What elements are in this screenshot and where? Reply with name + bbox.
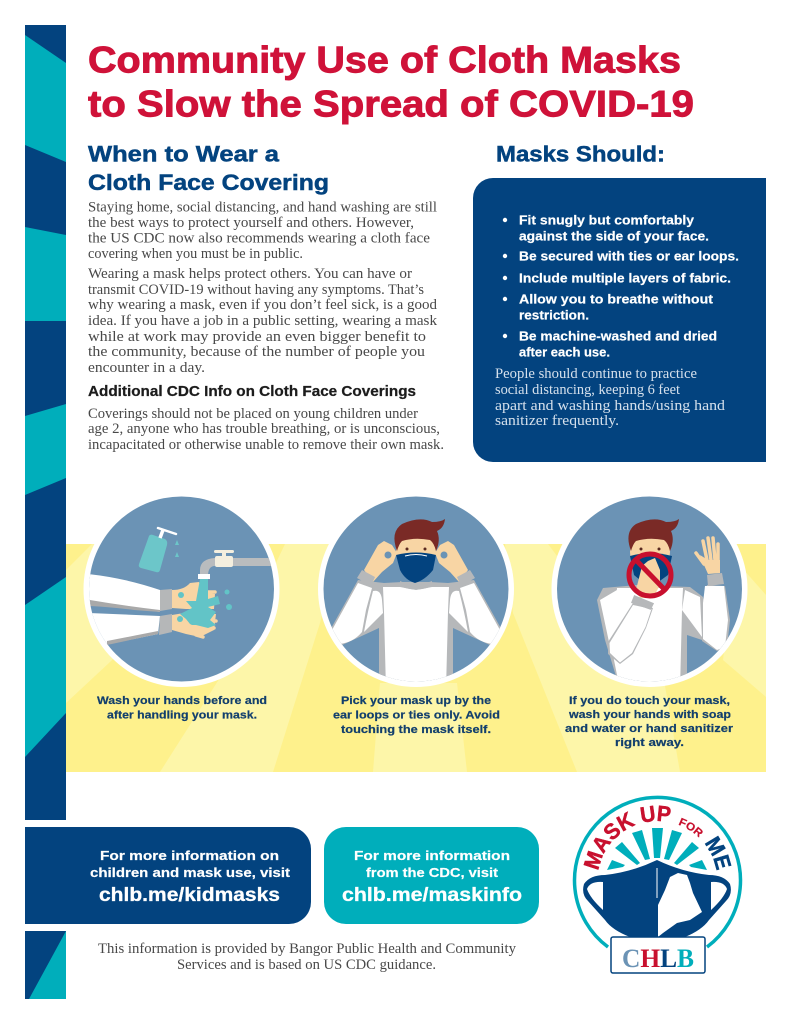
logo CHLB badge <box>611 937 705 973</box>
heading: when to wear: When to Wear a <box>88 142 280 166</box>
hands <box>364 541 397 582</box>
callout: CDC mask info: from the CDC, visit <box>366 865 499 880</box>
mask <box>630 554 672 581</box>
text block: intro paragraph: the US CDC now also recommends wearing a cloth face <box>88 230 430 246</box>
logo mask <box>583 860 731 942</box>
panel note: apart and washing hands/using hand <box>495 398 726 414</box>
hand on mask <box>636 558 660 598</box>
bullet list: Be machine-washed and dried <box>519 330 717 344</box>
panel note: People should continue to practice <box>495 366 697 382</box>
water and soap <box>180 579 220 628</box>
callout: CDC mask info: chlb.me/maskinfo <box>342 885 522 906</box>
caption: pick up mask: Pick your mask up by the <box>341 695 491 707</box>
logo rays <box>607 828 707 870</box>
bullet list: after each use. <box>519 346 610 360</box>
panel: masks should <box>473 178 766 462</box>
text block: why wear a mask: encounter in a day. <box>88 360 205 376</box>
icon: faucet <box>198 550 272 579</box>
panel note: sanitizer frequently. <box>495 413 619 429</box>
text block: additional info: age 2, anyone who has trouble breathing, or is unconscious, <box>88 421 440 437</box>
text block: why wear a mask: while at work may provide an even bigger benefit to <box>88 329 426 345</box>
text block: intro paragraph: the best ways to protect yourself and others. However, <box>88 215 414 231</box>
text block: why wear a mask: the community, because of the number of people you <box>88 344 425 360</box>
footer note: This information is provided by Bangor Public Health and Community <box>98 941 517 957</box>
arms and hands <box>88 574 160 612</box>
raised hand <box>696 538 724 586</box>
footer note: Services and is based on US CDC guidance. <box>177 957 436 973</box>
cuff <box>633 597 652 608</box>
logo text: MASK UP <box>584 805 671 870</box>
bullet list: Allow you to breathe without <box>519 292 714 306</box>
callout: CDC mask info: For more information <box>354 848 510 863</box>
heading: when to wear: Cloth Face Covering <box>88 170 329 195</box>
caption: wash hands <box>97 695 267 722</box>
logo Maine outline <box>658 873 702 937</box>
bullet list <box>503 214 739 360</box>
sweatshirt <box>597 585 703 690</box>
subheading: additional info: Additional CDC Info on Cloth Face Coverings <box>88 384 416 400</box>
icon: sanitizer bottle <box>139 528 179 572</box>
callout: kid masks: chlb.me/kidmasks <box>99 885 280 906</box>
caption: touch mask: If you do touch your mask, <box>569 695 730 707</box>
bullet list: restriction. <box>519 308 589 322</box>
logo CHLB badge: CHLB <box>622 944 694 973</box>
text block: intro paragraph: Staying home, social distancing, and hand washing are still <box>88 200 437 216</box>
bullet list: against the side of your face. <box>519 230 709 244</box>
logo text: ME <box>704 836 732 870</box>
head <box>630 538 670 556</box>
footer note <box>98 941 517 973</box>
mask <box>396 552 436 583</box>
callout: kid masks: children and mask use, visit <box>90 865 291 880</box>
logo text: FOR <box>678 818 703 838</box>
text block: why wear a mask: transmit COVID-19 without having any symptoms. That’s <box>88 282 424 298</box>
icon: person adjusting mask <box>318 491 514 690</box>
head <box>396 538 436 560</box>
text block: additional info: Coverings should not be placed on young children under <box>88 406 418 422</box>
yellow band with rays <box>66 544 766 772</box>
caption: touch mask: right away. <box>615 737 684 749</box>
caption: wash hands: Wash your hands before and <box>97 695 267 707</box>
title: to Slow the Spread of COVID-19 <box>88 84 694 124</box>
collar <box>400 581 432 590</box>
callout: CDC mask info <box>324 827 539 924</box>
text block: intro paragraph <box>88 200 437 262</box>
text block: why wear a mask: why wearing a mask, even if you don’t feel sick, is a good <box>88 297 438 313</box>
caption: wash hands: after handling your mask. <box>107 710 257 722</box>
callout: kid masks <box>25 827 311 924</box>
callout: kid masks: For more information on <box>100 848 279 863</box>
icon: washing hands <box>84 491 280 687</box>
caption: touch mask: wash your hands with soap <box>568 709 731 721</box>
title <box>88 40 694 124</box>
lower stripe block <box>25 931 66 999</box>
bullet list: Fit snugly but comfortably <box>519 214 694 228</box>
caption: touch mask: and water or hand sanitizer <box>565 723 734 735</box>
text block: why wear a mask: Wearing a mask helps protect others. You can have or <box>88 266 412 282</box>
cuffs <box>357 570 375 582</box>
text block: additional info <box>88 406 444 453</box>
logo text <box>584 805 732 870</box>
panel note <box>495 366 726 429</box>
heading: when to wear <box>88 142 329 195</box>
caption: touch mask <box>565 695 734 749</box>
text block: why wear a mask: idea. If you have a job in a public setting, wearing a mask <box>88 313 438 329</box>
icon: person touching mask with prohibition sign <box>552 491 748 690</box>
text block: why wear a mask <box>88 266 438 376</box>
title: Community Use of Cloth Masks <box>88 40 681 80</box>
bullet list: Include multiple layers of fabric. <box>519 272 731 286</box>
caption: pick up mask <box>333 695 500 736</box>
sweatshirt <box>332 580 500 682</box>
caption: pick up mask: ear loops or ties only. Avoid <box>333 710 500 722</box>
text block: additional info: incapacitated or otherwise unable to remove their own mask. <box>88 437 444 453</box>
decorative side stripe <box>25 25 66 820</box>
text block: intro paragraph: covering when you must be in public. <box>88 246 303 262</box>
panel note: social distancing, keeping 6 feet <box>495 382 680 398</box>
caption: pick up mask: touching the mask itself. <box>341 724 491 736</box>
bullet list: Be secured with ties or ear loops. <box>519 250 739 264</box>
heading: masks should: Masks Should: <box>496 142 665 166</box>
logo: Mask Up For Me <box>572 796 742 974</box>
prohibition sign <box>629 554 671 596</box>
